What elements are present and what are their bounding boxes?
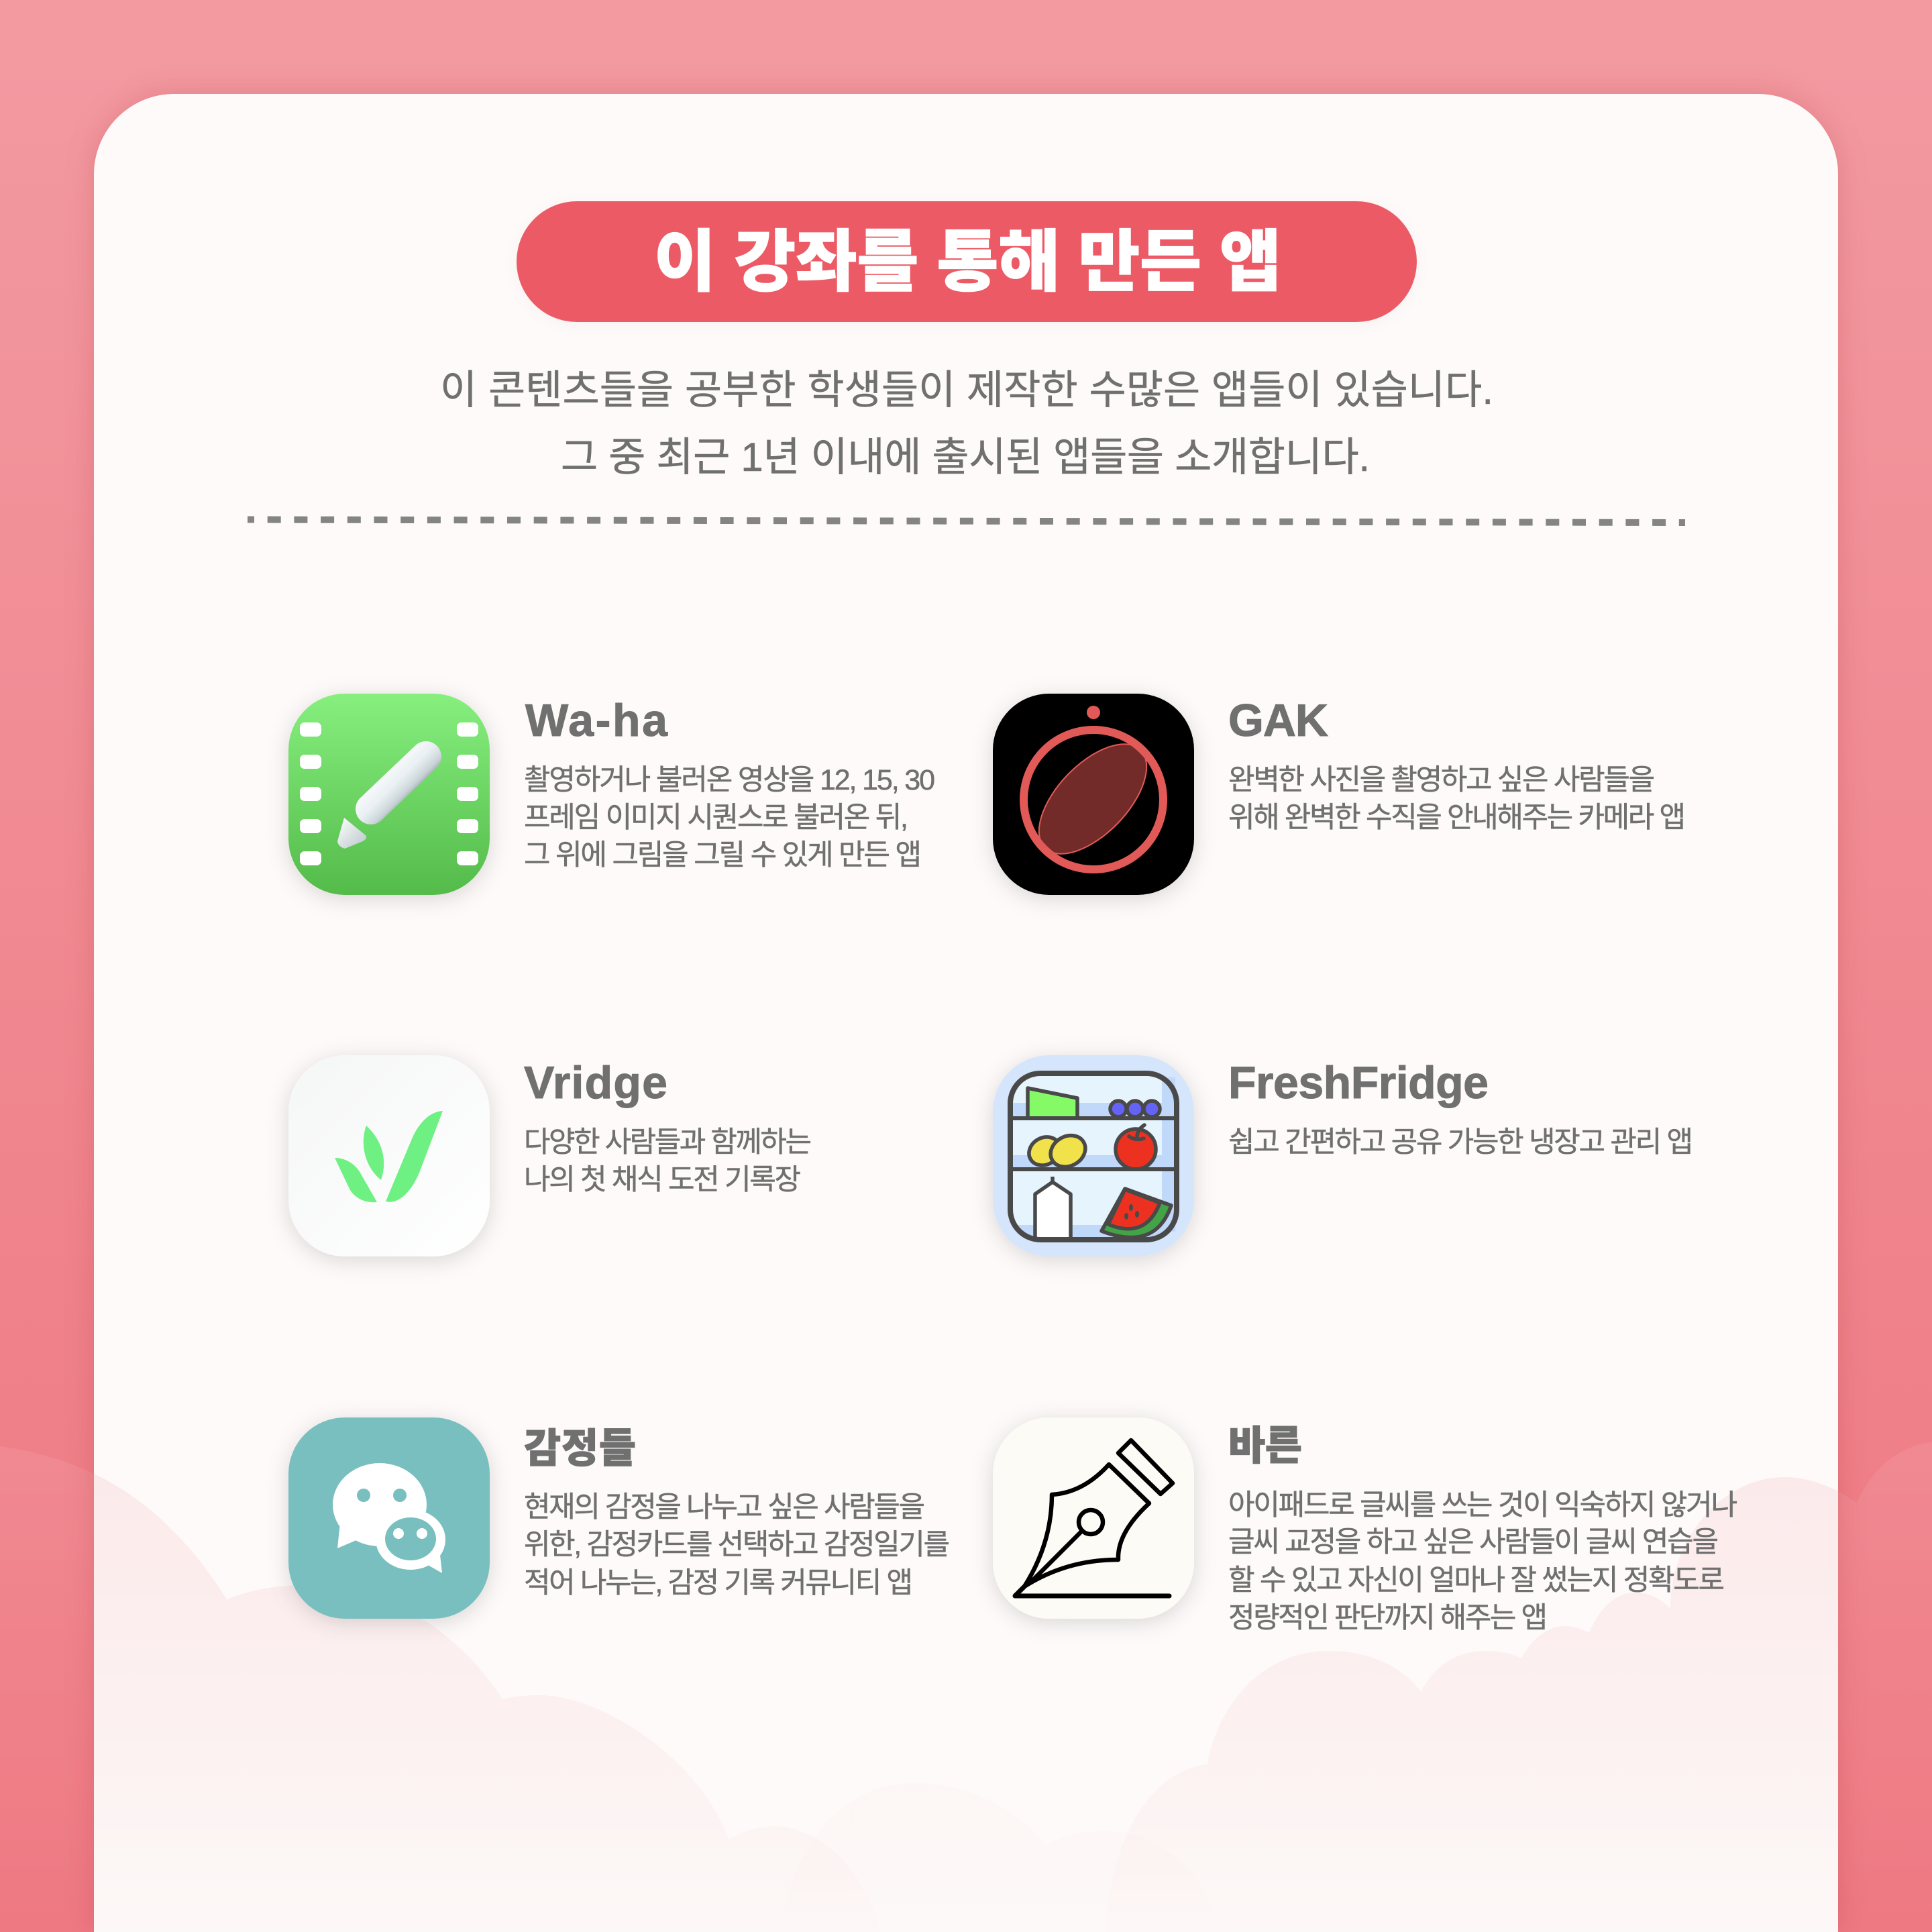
description: Wa-ha [524,764,935,871]
app: Vridge [288,1055,812,1256]
icon: 감정들 speech bubbles [288,1417,490,1619]
description: Vridge: 나의 첫 채식 도전 기록장 [524,1164,801,1196]
app name: Wa-ha: Wa-ha [525,695,668,746]
description: 바른: 아이패드로 글씨를 쓰는 것이 익숙하지 않거나 [1228,1489,1737,1521]
description: 감정들: 적어 나누는, 감정 기록 커뮤니티 앱 [524,1567,913,1599]
description: 감정들 [524,1491,950,1599]
description: 바른: 할 수 있고 자신이 얼마나 잘 썼는지 정확도로 [1228,1564,1725,1597]
clouds on the pink margin [0,1442,1932,1932]
description: Wa-ha: 그 위에 그림을 그릴 수 있게 만든 앱 [524,839,922,871]
description: FreshFridge: 쉽고 간편하고 공유 가능한 냉장고 관리 앱 [1228,1126,1693,1159]
icon: Vridge leaves [288,1055,490,1256]
title pill [517,201,1417,322]
icon: 바른 fountain pen nib [993,1417,1194,1619]
description: 감정들: 위한, 감정카드를 선택하고 감정일기를 [524,1529,950,1561]
description: Vridge: 다양한 사람들과 함께하는 [524,1126,812,1159]
description: 바른: 글씨 교정을 하고 싶은 사람들이 글씨 연습을 [1228,1526,1719,1558]
app name: FreshFridge: FreshFridge [1228,1057,1489,1108]
app name: 감정들: 감정들 [524,1426,636,1471]
app name: GAK: GAK [1228,695,1328,746]
app: 감정들 [288,1417,950,1619]
app: 바른 [993,1417,1737,1634]
app name: 바른: 바른 [1228,1424,1302,1468]
description: 바른: 정량적인 판단까지 해주는 앱 [1228,1602,1548,1634]
description: GAK: 완벽한 사진을 촬영하고 싶은 사람들을 [1228,764,1655,796]
app name: Vridge: Vridge [524,1057,667,1108]
subtitle: 그 중 최근 1년 이내에 출시된 앱들을 소개합니다. [561,435,1370,480]
app: FreshFridge [993,1055,1693,1256]
subtitle [440,368,1493,480]
app: GAK [993,694,1686,895]
description: Wa-ha: 프레임 이미지 시퀀스로 불러온 뒤, [524,802,908,834]
description: Vridge [524,1126,812,1196]
description: GAK: 위해 완벽한 수직을 안내해주는 카메라 앱 [1228,802,1686,834]
description: 바른 [1228,1489,1737,1634]
description: Wa-ha: 촬영하거나 불러온 영상을 12, 15, 30 [524,764,935,796]
icon: Wa-ha film and pencil [288,694,490,895]
title pill: 이 강좌를 통해 만든 앱 [654,225,1281,300]
app: Wa-ha [288,694,935,895]
subtitle: 이 콘텐츠들을 공부한 학생들이 제작한 수많은 앱들이 있습니다. [440,368,1493,413]
icon: GAK camera level [993,694,1194,895]
dotted divider [248,519,1685,523]
clouds inside the card [94,1442,1838,1837]
icon: FreshFridge shelves [993,1055,1194,1256]
description: GAK [1228,764,1686,834]
description: 감정들: 현재의 감정을 나누고 싶은 사람들을 [524,1491,925,1523]
